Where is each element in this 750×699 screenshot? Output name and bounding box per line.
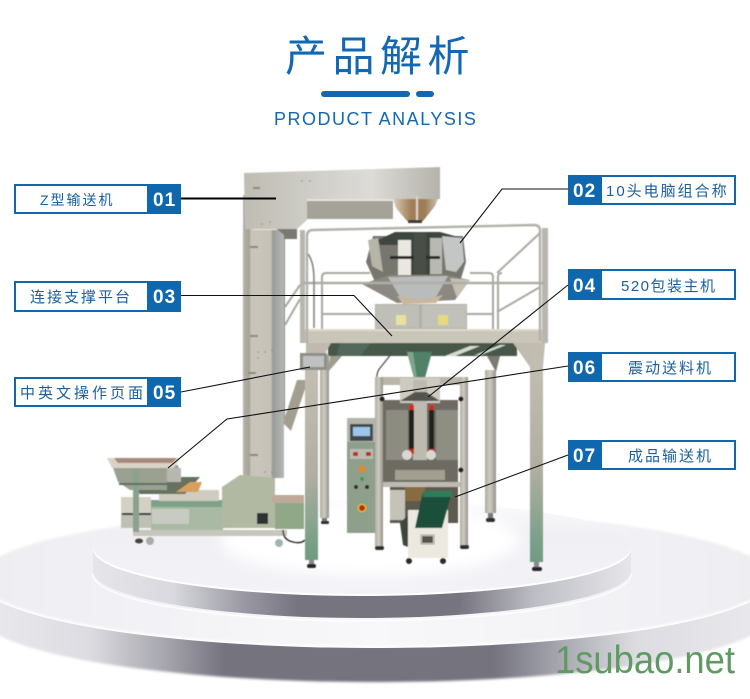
label 02 bbox=[568, 175, 735, 205]
weigher base bbox=[375, 304, 467, 329]
platform: lower tier bbox=[0, 510, 750, 682]
multihead weigher bbox=[362, 232, 470, 304]
touch screen on leg bbox=[300, 353, 327, 382]
label 01 bbox=[15, 184, 181, 214]
label 03: 连接支撑平台 bbox=[30, 289, 132, 306]
platform frame bbox=[305, 329, 545, 372]
front legs bbox=[305, 355, 543, 571]
label 01: Z型输送机 bbox=[40, 192, 115, 208]
leader line 03 bbox=[181, 296, 392, 336]
label 07: 07 bbox=[573, 446, 596, 467]
label 02: 10头电脑组合称 bbox=[606, 183, 729, 200]
label 04: 520包装主机 bbox=[621, 278, 717, 295]
watermark: 1subao.net bbox=[555, 639, 735, 682]
rear railing bbox=[322, 233, 540, 329]
leader line 01 bbox=[181, 198, 276, 200]
product conveyor bbox=[400, 491, 452, 564]
control panel bbox=[347, 418, 375, 533]
label 01: 01 bbox=[153, 190, 176, 211]
label 05: 中英文操作页面 bbox=[20, 384, 146, 402]
subtitle: PRODUCT ANALYSIS bbox=[274, 109, 477, 129]
platform: upper tier bbox=[93, 500, 631, 621]
label 04: 04 bbox=[573, 276, 596, 297]
label 07: 成品输送机 bbox=[628, 448, 713, 465]
label 06: 震动送料机 bbox=[628, 360, 713, 377]
cable bbox=[377, 353, 392, 410]
leader line 04 bbox=[428, 285, 568, 397]
title: 产品解析 bbox=[285, 33, 475, 80]
label 03: 03 bbox=[153, 287, 176, 308]
Z conveyor bbox=[243, 167, 440, 478]
discharge funnel bbox=[407, 352, 432, 378]
leader line 05 bbox=[181, 367, 310, 392]
label 03 bbox=[15, 281, 181, 312]
label 02: 02 bbox=[573, 181, 596, 202]
machine bbox=[107, 167, 548, 571]
label 05 bbox=[15, 377, 181, 407]
front railing bbox=[285, 225, 548, 343]
label 06 bbox=[568, 352, 735, 382]
hopper bbox=[393, 196, 438, 223]
title divider bbox=[321, 91, 434, 97]
feeder conveyor body bbox=[121, 475, 305, 547]
label 06: 06 bbox=[573, 358, 596, 379]
label 04 bbox=[568, 269, 735, 300]
label 07 bbox=[568, 440, 735, 470]
label 05: 05 bbox=[153, 383, 176, 404]
vibrating feeder bbox=[107, 458, 202, 532]
rear legs bbox=[320, 355, 496, 524]
leader line 02 bbox=[460, 189, 568, 243]
leader line 07 bbox=[455, 455, 568, 497]
packaging machine bbox=[375, 377, 469, 550]
leader line 06 bbox=[168, 366, 568, 468]
